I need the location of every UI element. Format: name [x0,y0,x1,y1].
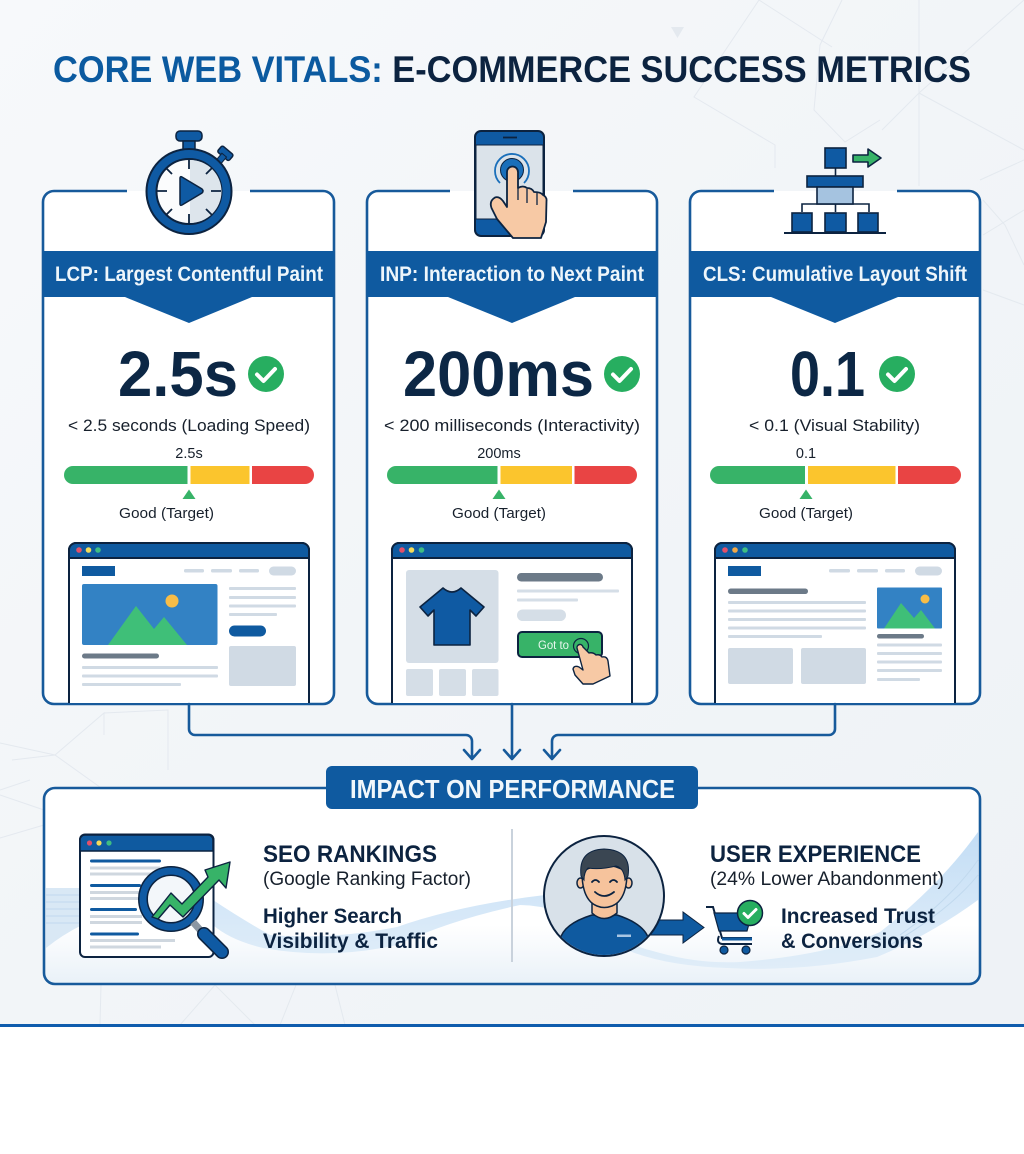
gauge: INP: 200ms [477,446,521,462]
browser mock: article page [715,543,955,703]
button: got to: Got to [538,640,569,652]
icon: check badge [604,356,640,392]
gauge: CLS: 0.1 [796,446,816,462]
icon: check badge [879,356,915,392]
threshold description: < 200 milliseconds (Interactivity) [384,416,640,435]
panel: impact on performance [44,766,980,984]
text: SEO rankings [263,841,471,953]
browser mock: hero image page [69,543,309,703]
icon: layout shift blocks [784,148,886,233]
gauge: LCP: Good (Target) [119,505,214,522]
text: SEO rankings: SEO RANKINGS [263,841,437,868]
gauge: CLS [710,446,961,522]
panel: CLS [690,148,980,704]
gauge: INP: Good (Target) [452,505,546,522]
icon: smiling user [544,836,664,960]
title: CORE WEB VITALS: E-COMMERCE SUCCESS METRICS [53,49,971,90]
threshold description: < 2.5 seconds (Loading Speed) [68,416,310,435]
panel: LCP [43,131,334,704]
badge heading [326,766,698,809]
icon: phone tap [475,131,547,238]
text: user experience: Increased Trust [781,904,935,928]
icon: shopping cart with check [706,900,762,954]
icon: t-shirt [420,588,484,645]
gauge: CLS: Good (Target) [759,505,853,522]
banner: INP: INP: Interaction to Next Paint [380,263,644,286]
text: user experience: (24% Lower Abandonment) [710,869,944,890]
badge heading: IMPACT ON PERFORMANCE [350,774,675,804]
text: user experience: USER EXPERIENCE [710,841,921,868]
banner: LCP [43,251,334,323]
panel: INP [367,131,657,704]
icon: arrow to cart [645,912,704,943]
banner: INP [367,251,657,323]
banner: LCP: LCP: Largest Contentful Paint [55,263,323,286]
metric value: 200ms: 200ms [403,338,594,410]
banner: CLS [690,251,980,323]
text: SEO rankings: (Google Ranking Factor) [263,869,471,890]
text: SEO rankings: Visibility & Traffic [263,929,438,953]
gauge: INP [387,446,637,522]
gauge: LCP: 2.5s [175,446,203,462]
banner: CLS: CLS: Cumulative Layout Shift [703,263,967,286]
button: got to [518,632,610,684]
text: user experience: & Conversions [781,929,923,953]
browser mock: product page [392,543,632,703]
metric value: 0.1: 0.1 [790,338,865,410]
threshold description: < 0.1 (Visual Stability) [749,416,920,435]
footer rule [0,1024,1024,1027]
metric value: 2.5s: 2.5s [118,338,238,410]
decorative wave [46,832,978,969]
icon: SEO window and magnifier [80,834,230,957]
text: SEO rankings: Higher Search [263,904,402,928]
connector arrows [189,704,835,759]
icon: check badge [248,356,284,392]
gauge: LCP [64,446,314,522]
text: user experience [710,841,944,953]
icon: stopwatch [146,131,234,234]
